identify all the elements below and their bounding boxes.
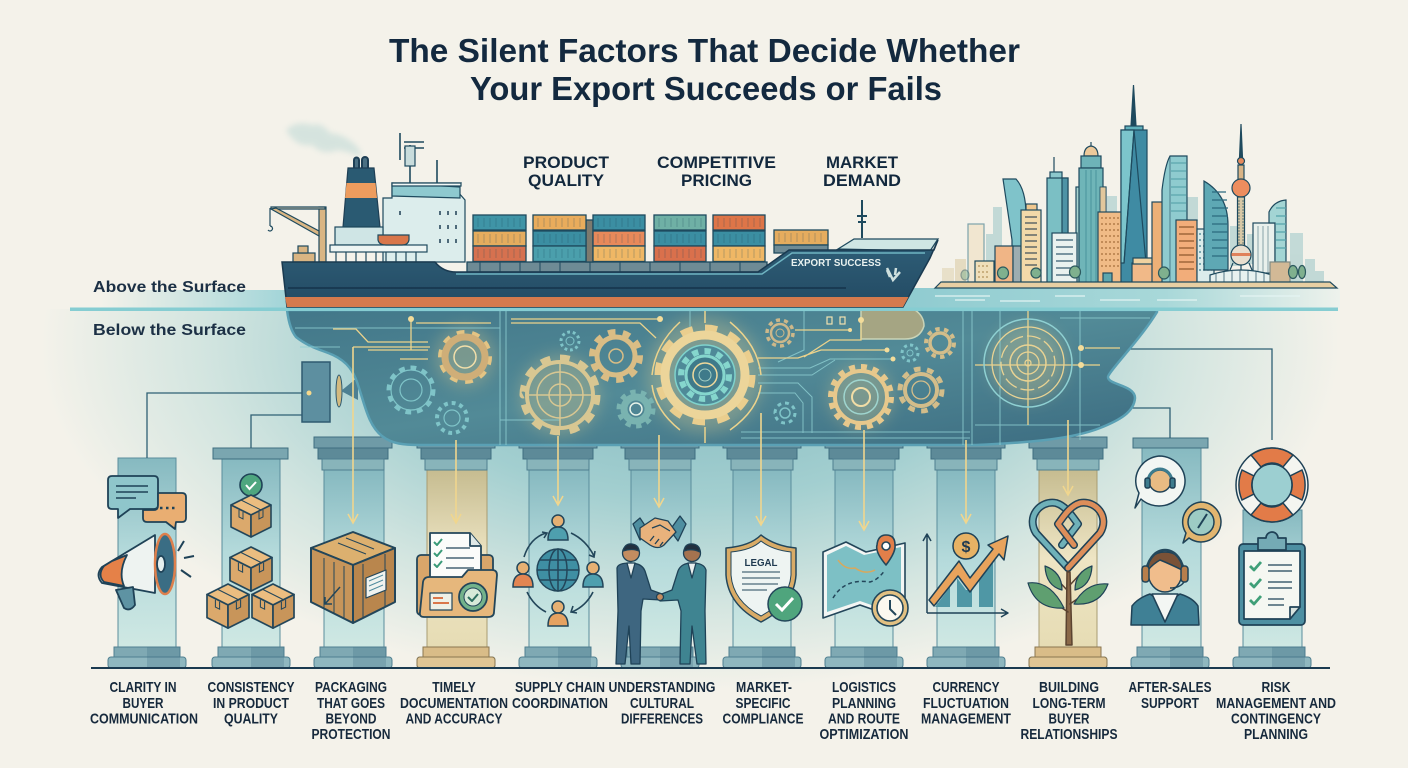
- caption 6: DIFFERENCES: [621, 710, 703, 728]
- ship hull above water: [282, 240, 938, 307]
- caption 5: COORDINATION: [512, 695, 608, 712]
- teal thin tower: [1053, 157, 1055, 172]
- pillar 6: [621, 437, 699, 668]
- person right: [583, 562, 603, 587]
- icon: communication bubbles and megaphone: [98, 476, 194, 609]
- gear: large gold: [523, 358, 597, 432]
- striped amber tower: [1026, 204, 1037, 211]
- left low buildings: [968, 224, 994, 283]
- caption 1: COMMUNICATION: [90, 710, 198, 728]
- circuit lines teal: [295, 311, 1150, 445]
- caption 12: MANAGEMENT AND: [1216, 695, 1336, 712]
- pillar captions: [90, 679, 1336, 743]
- pillar 4: [417, 437, 495, 668]
- low tan block: [1270, 262, 1290, 283]
- icon: currency chart: $: [962, 539, 971, 556]
- icon: quality boxes with check: [207, 474, 294, 628]
- icon: wooden crate: [311, 532, 395, 623]
- superstructure: [330, 133, 465, 262]
- pillar 9: [927, 437, 1005, 668]
- caption 10: RELATIONSHIPS: [1020, 726, 1118, 743]
- gear: upper right: [926, 329, 954, 357]
- water above surface: left: [100, 290, 290, 308]
- twin set tower: [1090, 142, 1092, 146]
- water above surface: right: [900, 288, 1340, 308]
- pillar 5: [519, 437, 597, 668]
- headings above deck: QUALITY: [528, 171, 605, 190]
- stadium: [1210, 270, 1272, 283]
- headings above deck: PRODUCT: [523, 153, 610, 172]
- caption 3: BEYOND: [326, 710, 377, 728]
- heart link: teal: [1033, 503, 1078, 568]
- caption 4: DOCUMENTATION: [400, 695, 508, 712]
- gear: main central: [652, 311, 761, 443]
- funnel: [343, 157, 380, 227]
- title: Your Export Succeeds or Fails: [470, 70, 942, 107]
- amber block: [995, 246, 1013, 283]
- gear: right medium: [900, 369, 942, 411]
- pillar 1: [108, 458, 186, 668]
- caption 4: AND ACCURACY: [406, 710, 502, 728]
- icon: linked heart and tree: [1028, 503, 1108, 645]
- curved tower right: [1204, 181, 1228, 270]
- icon: lifebuoy: [1236, 448, 1308, 522]
- caption 8: AND ROUTE: [828, 710, 900, 728]
- caption 3: THAT GOES: [317, 695, 385, 712]
- title: [389, 32, 1020, 107]
- pillar bases and shafts: [108, 437, 1311, 668]
- headings above deck: [523, 153, 901, 190]
- gear: upper middle gold: [592, 332, 640, 380]
- containers: [467, 215, 828, 272]
- caption 7: COMPLIANCE: [722, 710, 804, 728]
- headings above deck: PRICING: [681, 171, 752, 190]
- gear: upper left gold: [441, 333, 489, 381]
- pillar 10: [1029, 437, 1107, 668]
- oriental pearl tower: [1230, 124, 1252, 270]
- caption 9: FLUCTUATION: [923, 695, 1009, 712]
- underwater gradient: [0, 309, 1408, 719]
- caption 12: RISK: [1262, 679, 1291, 696]
- main tower: [1131, 85, 1136, 126]
- grid block: [1197, 229, 1214, 283]
- caption 4: TIMELY: [432, 679, 476, 696]
- striped white building: [1052, 233, 1077, 283]
- connector lines to outer pillars: [147, 349, 1272, 458]
- icon: legal shield: [726, 535, 802, 622]
- water highlights: [935, 296, 1300, 301]
- rudder plate and propeller: [302, 362, 358, 422]
- agent: [1131, 550, 1199, 625]
- caption 2: IN PRODUCT: [213, 695, 289, 712]
- person top: [548, 515, 568, 540]
- slim block right: [1253, 223, 1275, 273]
- gold arrows into pillars: [348, 347, 1073, 530]
- orange slim: [1152, 202, 1166, 283]
- icon: document folder: [417, 533, 497, 617]
- background pale buildings: [942, 196, 1324, 283]
- gold glows: [435, 317, 1066, 435]
- caption 12: PLANNING: [1244, 726, 1308, 743]
- gear: small teal: [561, 332, 579, 350]
- circuit lines gold: [333, 311, 1120, 425]
- headings above deck: MARKET: [826, 153, 899, 172]
- caption 7: SPECIFIC: [736, 695, 791, 712]
- pillar 11: [1131, 438, 1209, 668]
- handshake: [633, 516, 686, 548]
- caption 10: BUYER: [1048, 710, 1090, 728]
- caption 1: BUYER: [122, 695, 164, 712]
- caption 10: LONG-TERM: [1032, 695, 1106, 712]
- gear: left outline: [389, 368, 433, 412]
- gear: right large gold: [831, 367, 891, 427]
- label: below the surface: Below the Surface: [93, 322, 246, 339]
- teal stripe tower: [1162, 156, 1187, 283]
- caption 8: LOGISTICS: [832, 679, 896, 696]
- caption 3: PACKAGING: [315, 679, 387, 696]
- notch in hull: [861, 310, 924, 339]
- icon: risk clipboard: [1239, 532, 1305, 625]
- icon: handshake and two businessmen: [616, 516, 706, 664]
- crane: [268, 207, 326, 262]
- left businessman: [616, 544, 662, 664]
- headings above deck: DEMAND: [823, 171, 901, 190]
- underwater hull: [287, 310, 1157, 445]
- caption 8: PLANNING: [832, 695, 896, 712]
- notch details: [827, 317, 845, 324]
- waterfront land strip: [935, 282, 1337, 288]
- caption 10: BUILDING: [1039, 679, 1099, 696]
- surface line: [70, 308, 1338, 311]
- pillar 12: [1233, 510, 1311, 668]
- caption 2: QUALITY: [224, 710, 278, 728]
- caption 9: CURRENCY: [932, 679, 1000, 696]
- gear: top centre small: [767, 320, 793, 346]
- curved small right: [1269, 200, 1286, 262]
- caption 3: PROTECTION: [312, 726, 390, 743]
- caption 11: AFTER-SALES: [1128, 679, 1212, 696]
- orange grid building: [1098, 212, 1124, 283]
- person left: [513, 562, 533, 587]
- caption 1: CLARITY IN: [110, 679, 176, 696]
- icon: supply chain network: [513, 515, 603, 626]
- icon: legal shield: LEGAL: [744, 558, 778, 569]
- radar concentric dial: [984, 319, 1072, 407]
- title: The Silent Factors That Decide Whether: [389, 32, 1020, 69]
- gear: lower left outline: [437, 403, 467, 433]
- city skyline: [942, 85, 1324, 283]
- gear: small teal right: [902, 345, 918, 361]
- trees: [961, 266, 1306, 280]
- caption 6: CULTURAL: [630, 695, 694, 712]
- caption 6: UNDERSTANDING: [608, 679, 716, 696]
- ship name: EXPORT SUCCESS: [791, 257, 881, 269]
- label: above the surface: Above the Surface: [93, 279, 246, 296]
- bow deck and mast: [838, 200, 938, 251]
- pillar 7: [723, 437, 801, 668]
- caption 8: OPTIMIZATION: [820, 726, 908, 743]
- caption 12: CONTINGENCY: [1231, 710, 1321, 728]
- heart link: orange: [1058, 503, 1103, 568]
- ground line: [91, 667, 1330, 669]
- pillar 8: [825, 437, 903, 668]
- gauge bubble: [1183, 502, 1221, 543]
- caption 11: SUPPORT: [1141, 695, 1199, 712]
- headset bubble: [1135, 456, 1185, 508]
- right businessman: [656, 544, 706, 664]
- icon: currency chart: [923, 533, 1008, 617]
- headings above deck: COMPETITIVE: [657, 153, 776, 172]
- pillar 3: [314, 437, 392, 668]
- podium: [1132, 263, 1157, 283]
- curved tower left: [1003, 179, 1026, 283]
- check badge: [240, 474, 262, 496]
- person bottom: [548, 601, 568, 626]
- icon: after-sales support: [1131, 456, 1221, 625]
- gear: small teal low: [775, 403, 795, 423]
- pillar 2: [212, 448, 290, 668]
- gear: teal filled: [619, 392, 653, 426]
- caption 5: SUPPLY CHAIN: [515, 679, 605, 696]
- icon: map, pin and clock: [823, 535, 908, 626]
- caption 7: MARKET-: [736, 679, 792, 696]
- sapling: [1044, 572, 1093, 645]
- smoke: [286, 123, 361, 157]
- caption 2: CONSISTENCY: [208, 679, 294, 696]
- orange striped block: [1176, 220, 1197, 283]
- caption 9: MANAGEMENT: [921, 710, 1011, 728]
- anchor: [887, 268, 900, 280]
